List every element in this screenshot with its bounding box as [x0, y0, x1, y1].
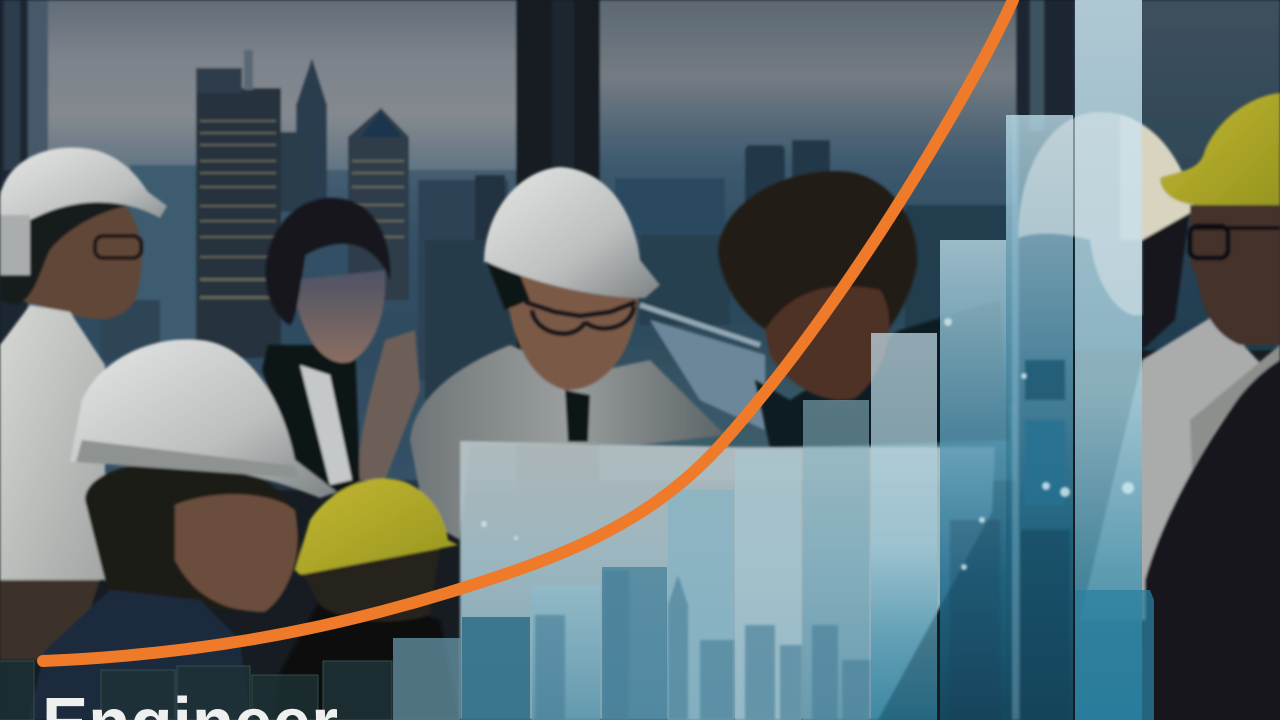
bar: rising bar 8: [532, 585, 600, 720]
person: center engineer in white hard hat: [410, 167, 725, 540]
person: engineer at left in white hard hat: [0, 147, 167, 660]
bar: rising bar 14: [940, 240, 1006, 720]
person: smiling woman with dark hair: [262, 198, 420, 500]
bar: rising bar 7: [462, 617, 530, 720]
skyline reflected in bars: [535, 570, 870, 720]
person: front-left engineer in white hard hat: [28, 339, 337, 720]
bar: rising bar 9: [602, 567, 667, 720]
person: engineer in yellow hard hat: [275, 478, 460, 720]
bar: rising bar 12: [803, 400, 869, 720]
bar: rising bar 11: [735, 450, 801, 720]
hard hat seen through glass: [1018, 112, 1142, 315]
bar: rising bar 15: [1006, 115, 1073, 720]
orange growth curve: [43, 0, 1013, 661]
person: man in white hat behind glass: [1080, 115, 1262, 620]
person: woman with afro hair: [718, 171, 1010, 448]
bar: rising bar 6: [393, 638, 460, 720]
bar: rising bar 13: [871, 333, 937, 720]
glowing dots: [481, 318, 1134, 570]
glass panel: large pale sheet behind bars: [460, 441, 995, 720]
bars: dark low bars: [0, 661, 392, 720]
tablet at lower right: [1075, 590, 1154, 720]
circuit detail in glass bar: [950, 115, 1070, 720]
person: woman in yellow hat at right: [1145, 93, 1280, 720]
bar: rising bar 10: [668, 490, 734, 720]
bar: tallest bar: [1075, 0, 1142, 720]
